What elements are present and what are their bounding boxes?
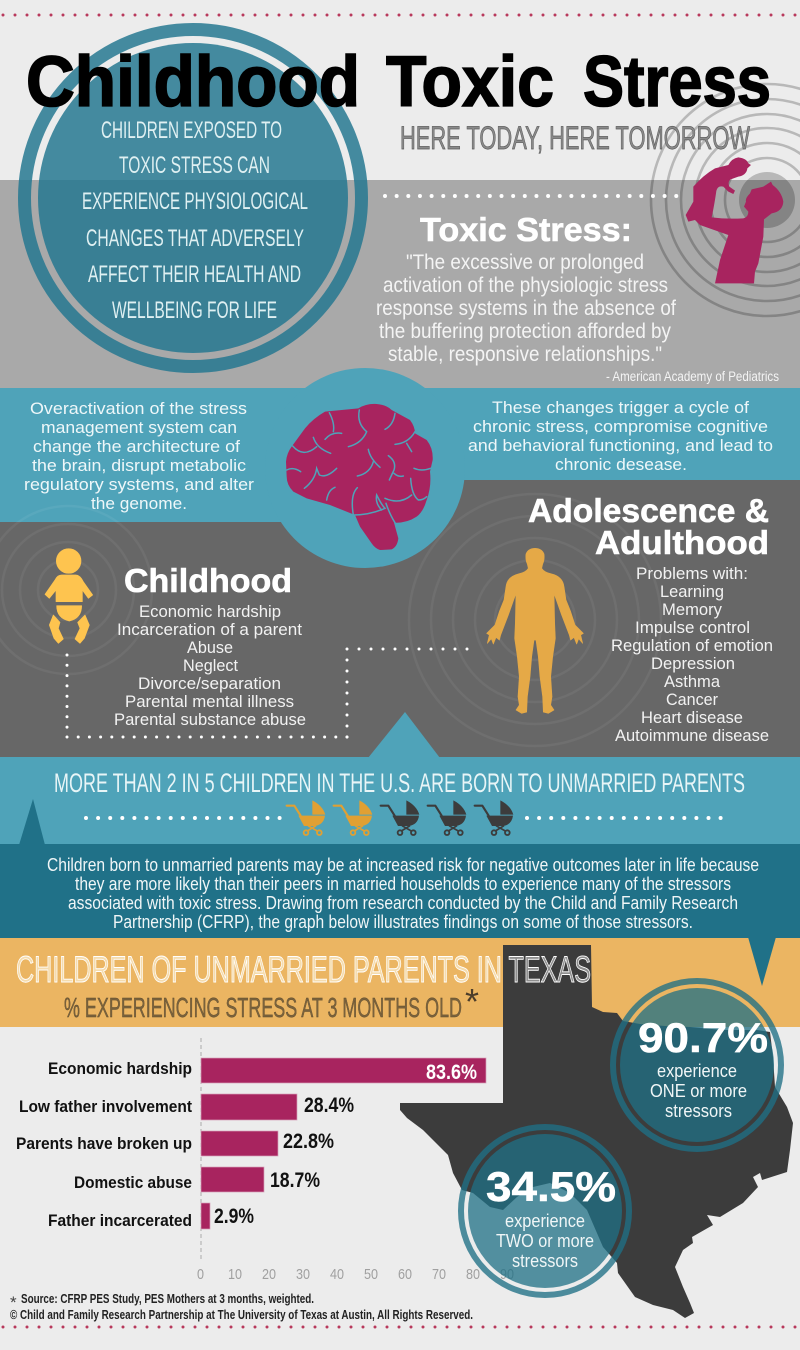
definition quote: activation of the physiologic stress — [383, 274, 668, 297]
icons: five strollers, two highlighted — [287, 800, 513, 835]
axis tick labels: 60 — [398, 1266, 412, 1283]
bar labels: Parents have broken up — [16, 1134, 192, 1153]
footer: source and copyright: * — [10, 1293, 17, 1312]
explanation paragraph: Partnership (CFRP), the graph below illustrates findings on some of those stressors. — [113, 912, 693, 932]
heading: children of unmarried parents in Texas: CHILDREN OF UNMARRIED PARENTS IN TEXAS — [16, 949, 591, 990]
callout: 90.7 percent: 90.7% — [638, 1014, 768, 1061]
subheading: percent experiencing stress: % EXPERIENCING STRESS AT 3 MONTHS OLD — [64, 992, 462, 1023]
bar labels: Economic hardship — [48, 1059, 192, 1078]
heading: adolescence and adulthood: Adolescence & — [528, 492, 769, 529]
text: cycle of chronic stress: and behavioral functioning, and lead to — [468, 436, 773, 455]
axis tick labels — [197, 1266, 514, 1283]
band: unmarried parents heading — [0, 757, 800, 844]
text: overactivation: the genome. — [91, 494, 187, 513]
bar chart — [16, 1038, 514, 1283]
list: childhood stressors: Economic hardship — [139, 603, 281, 621]
bar values: 83.6% — [426, 1061, 477, 1084]
list: childhood stressors: Parental substance abuse — [114, 711, 306, 729]
explanation paragraph — [47, 855, 759, 932]
arrow: teal triangle up — [368, 712, 440, 758]
footer: source and copyright — [10, 1292, 473, 1322]
title — [26, 43, 771, 122]
bar labels — [16, 1059, 192, 1230]
axis tick labels: 30 — [296, 1266, 310, 1283]
faint rings behind baby — [0, 506, 152, 674]
heading: childhood: Childhood — [124, 562, 292, 599]
asterisk: * — [465, 981, 479, 1022]
text: overactivation: management system can — [41, 418, 237, 437]
large teal circle callout — [24, 30, 362, 366]
title: Toxic — [386, 43, 554, 122]
band: Texas heading — [0, 938, 800, 1027]
heading: adolescence and adulthood: Adulthood — [595, 524, 769, 561]
arrow: dark teal triangle up — [19, 799, 45, 845]
text: overactivation: the brain, disrupt metabolic — [32, 456, 247, 475]
text: overactivation — [24, 399, 254, 513]
circle callout text: AFFECT THEIR HEALTH AND — [88, 261, 301, 288]
title: Stress — [583, 43, 771, 122]
axis tick labels: 0 — [197, 1266, 204, 1283]
list: adult problems: Cancer — [666, 691, 718, 709]
list: childhood stressors: Abuse — [187, 639, 233, 657]
list: childhood stressors — [114, 603, 306, 729]
list: adult problems: Depression — [651, 655, 735, 673]
text: overactivation: Overactivation of the stress — [30, 399, 247, 418]
bottom dotted divider — [3, 1326, 800, 1328]
brain backing circle — [265, 368, 465, 568]
text: cycle of chronic stress — [468, 398, 773, 474]
list: adult problems: Problems with: — [636, 565, 748, 583]
circle callout text: TOXIC STRESS CAN — [119, 152, 270, 179]
callout: 90.7 percent: stressors — [665, 1101, 732, 1121]
heading: adolescence and adulthood — [528, 492, 769, 561]
callout: 90.7 percent — [613, 981, 781, 1149]
title: Childhood — [26, 43, 360, 122]
callout: 34.5 percent: stressors — [512, 1251, 578, 1271]
circle callout text: WELLBEING FOR LIFE — [112, 297, 277, 324]
list: childhood stressors: Neglect — [183, 657, 238, 675]
arrow: teal callout pointer — [748, 937, 776, 986]
list: adult problems: Heart disease — [641, 709, 743, 727]
list: adult problems: Autoimmune disease — [615, 727, 769, 745]
definition quote: stable, responsive relationships." — [388, 343, 662, 366]
bars — [201, 1058, 486, 1229]
band: explanation paragraph — [0, 844, 800, 938]
text: cycle of chronic stress: These changes trigger a cycle of — [492, 398, 749, 417]
band: brain text — [0, 388, 800, 522]
definition quote: the buffering protection afforded by — [379, 320, 671, 343]
axis tick labels: 50 — [364, 1266, 378, 1283]
bar labels: Domestic abuse — [74, 1173, 192, 1192]
footer: source and copyright: Source: CFRP PES Study, PES Mothers at 3 months, weighted. — [21, 1292, 314, 1306]
list: adult problems: Asthma — [664, 673, 721, 691]
list: adult problems: Memory — [662, 601, 723, 619]
axis tick labels: 40 — [330, 1266, 344, 1283]
bar values — [214, 1061, 477, 1228]
list: adult problems: Regulation of emotion — [611, 637, 773, 655]
list: adult problems: Learning — [660, 583, 724, 601]
heading: toxic stress: Toxic Stress: — [420, 211, 632, 248]
axis tick labels: 10 — [228, 1266, 242, 1283]
concentric rings behind parent and child — [651, 84, 800, 316]
circle callout text: EXPERIENCE PHYSIOLOGICAL — [82, 188, 308, 215]
band: toxic stress definition — [0, 180, 800, 388]
circle callout text: CHILDREN EXPOSED TO — [101, 117, 282, 144]
bar labels: Low father involvement — [19, 1097, 192, 1116]
bar values: 22.8% — [283, 1130, 334, 1153]
band: dark life stages — [0, 478, 800, 758]
text: cycle of chronic stress: chronic stress, compromise cognitive — [473, 417, 768, 436]
axis tick labels: 20 — [262, 1266, 276, 1283]
text: overactivation: regulatory systems, and alter — [24, 475, 254, 494]
map: Texas — [400, 945, 793, 1318]
callout: 34.5 percent — [461, 1127, 629, 1295]
list: childhood stressors: Divorce/separation — [138, 675, 281, 693]
icon: brain — [286, 404, 433, 550]
text: overactivation: change the architecture of — [33, 437, 240, 456]
definition quote: "The excessive or prolonged — [406, 251, 644, 274]
bar labels: Father incarcerated — [48, 1211, 192, 1230]
icon: parent lifting child — [686, 157, 783, 283]
dotted divider left of strollers — [86, 816, 281, 820]
list: adult problems — [611, 565, 773, 745]
callout: 34.5 percent: 34.5% — [486, 1163, 616, 1210]
bar values: 2.9% — [214, 1205, 254, 1228]
list: adult problems: Impulse control — [635, 619, 750, 637]
axis tick labels: 70 — [432, 1266, 446, 1283]
dotted connector from childhood to adulthood — [67, 649, 472, 737]
icon: baby — [45, 549, 93, 643]
circle callout text — [82, 117, 308, 324]
circle callout text: CHANGES THAT ADVERSELY — [86, 225, 304, 252]
dotted divider right of strollers — [527, 816, 722, 820]
callout: 34.5 percent: TWO or more — [496, 1231, 594, 1251]
bar values: 18.7% — [270, 1169, 320, 1192]
faint rings behind body — [409, 494, 661, 746]
icon: adult body — [487, 548, 583, 713]
bar values: 28.4% — [304, 1094, 354, 1117]
top dotted divider — [3, 14, 800, 16]
definition quote — [376, 251, 676, 366]
dotted divider: toxic stress — [385, 194, 677, 198]
axis tick labels: 80 — [466, 1266, 480, 1283]
axis tick labels: 90 — [500, 1266, 514, 1283]
footer: source and copyright: © Child and Family Research Partnership at The University of Texas at Austin, All Rights Reserved. — [10, 1308, 473, 1322]
text: cycle of chronic stress: chronic desease. — [555, 455, 687, 474]
list: childhood stressors: Parental mental illness — [125, 693, 294, 711]
list: childhood stressors: Incarceration of a parent — [117, 621, 302, 639]
definition quote: response systems in the absence of — [376, 297, 676, 320]
callout: 90.7 percent: experience — [657, 1061, 737, 1081]
callout: 90.7 percent: ONE or more — [650, 1081, 747, 1101]
callout: 34.5 percent: experience — [505, 1211, 585, 1231]
